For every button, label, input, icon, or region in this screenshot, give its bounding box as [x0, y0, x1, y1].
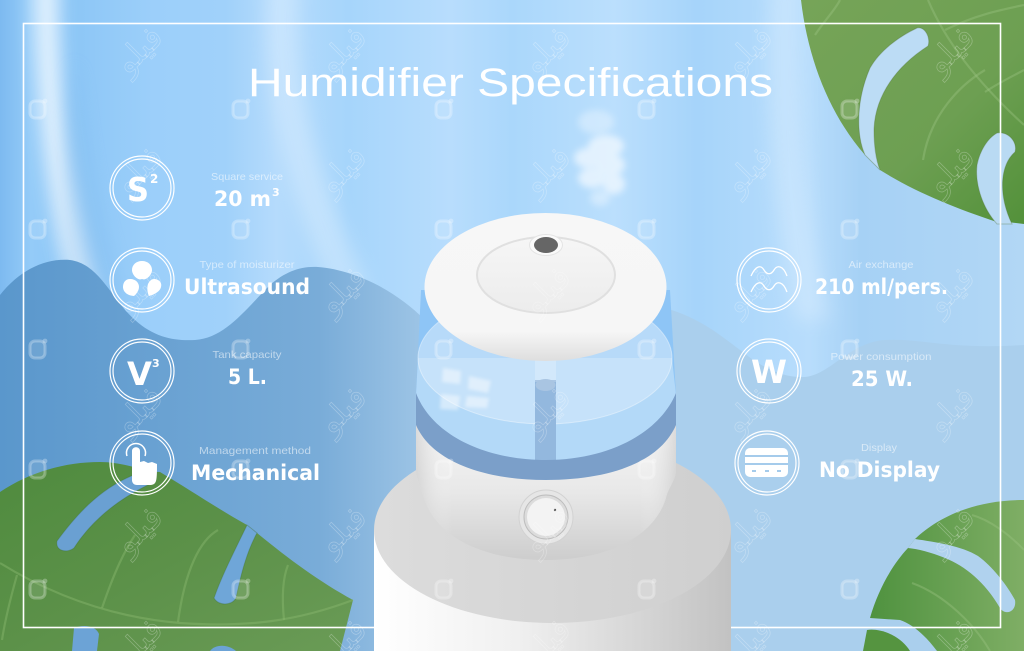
leaf slits — [859, 28, 929, 170]
leaf veins — [0, 530, 353, 640]
spec: power consumption: 25 W. — [851, 367, 913, 391]
leaf: top right — [801, 0, 1024, 224]
humidifier on pedestal — [374, 213, 731, 651]
watermark pattern: فیلو — [309, 258, 374, 323]
spec: tank capacity: Tank capacity — [212, 349, 282, 361]
watermark pattern: فیلو — [513, 498, 578, 563]
lid — [424, 213, 666, 361]
watermark pattern: فیلو — [513, 138, 578, 203]
leaf slits — [57, 474, 150, 551]
spec: tank capacity — [110, 339, 282, 403]
spec: type of moisturizer: Type of moisturizer — [200, 259, 295, 271]
watermark pattern: فیلو — [917, 18, 982, 83]
watermark pattern: فیلو — [513, 258, 578, 323]
icon: air waves — [737, 248, 801, 312]
spec: management method: Mechanical — [191, 461, 320, 485]
icon: V cubed: 3 — [152, 357, 160, 370]
spec: power consumption: Power consumption — [830, 351, 932, 363]
watermark pattern: فیلو — [105, 258, 170, 323]
spec: management method: Management method — [199, 445, 311, 457]
leaf veins — [815, 0, 1024, 160]
watermark pattern: فیلو — [105, 138, 170, 203]
watermark pattern: فیلو — [309, 498, 374, 563]
steam hole — [530, 234, 562, 256]
steam — [574, 110, 625, 206]
watermark pattern: فیلو — [105, 378, 170, 443]
blue band — [416, 393, 676, 480]
watermark pattern: فیلو — [309, 18, 374, 83]
watermark pattern: فیلو — [917, 258, 982, 323]
watermark pattern: فیلو — [715, 258, 780, 323]
water tube — [535, 380, 556, 462]
icon: S squared — [110, 156, 174, 220]
icon: display panel — [735, 431, 799, 495]
watermark pattern: فیلو — [917, 498, 982, 563]
watermark pattern: فیلو — [917, 378, 982, 443]
title: Humidifier Specifications — [248, 61, 773, 105]
watermark pattern: فیلو — [513, 18, 578, 83]
lid cap — [477, 237, 615, 313]
icon: S squared: S — [127, 170, 149, 209]
watermark pattern: فیلو — [513, 378, 578, 443]
spec: square service: Square service — [211, 171, 283, 183]
spec: management method — [110, 431, 320, 495]
leaf: bottom right — [863, 500, 1024, 651]
spec: square service: 3 — [272, 186, 280, 199]
spec: air exchange: Air exchange — [848, 259, 914, 271]
spec: square service — [110, 156, 283, 220]
spec: type of moisturizer: Ultrasound — [184, 275, 310, 299]
spec: air exchange — [737, 248, 948, 312]
watermark pattern: فیلو — [105, 18, 170, 83]
spec: square service: 20 m — [214, 187, 271, 211]
leaf veins — [912, 515, 1024, 651]
tank — [416, 290, 676, 462]
watermark pattern: فیلو — [715, 138, 780, 203]
watermark pattern: فیلو — [309, 138, 374, 203]
spec: air exchange: 210 ml/pers. — [815, 275, 948, 299]
icon: W: W — [751, 353, 787, 391]
spec: display — [735, 431, 940, 495]
spec: power consumption — [737, 339, 932, 403]
watermark pattern: فیلو — [917, 138, 982, 203]
control knob — [519, 490, 573, 544]
icon: water drops — [110, 248, 174, 312]
icon: S squared: 2 — [150, 172, 158, 186]
left wave — [0, 260, 425, 651]
window reflection — [440, 368, 491, 410]
watermark pattern: فیلو — [715, 378, 780, 443]
icon: V cubed: V — [127, 355, 152, 393]
leaf: bottom left — [0, 462, 353, 651]
watermark pattern: فیلو — [309, 378, 374, 443]
watermark pattern: فیلو — [105, 498, 170, 563]
right wave — [665, 308, 1024, 651]
watermark pattern: فیلو — [715, 18, 780, 83]
leaf slit — [908, 539, 1015, 612]
water surface — [418, 292, 672, 424]
icon: pointing hand — [110, 431, 174, 495]
base body — [416, 410, 676, 560]
spec: type of moisturizer — [110, 248, 310, 312]
spec: display: No Display — [819, 458, 940, 482]
spec: tank capacity: 5 L. — [228, 365, 267, 389]
pedestal — [374, 437, 731, 651]
watermark pattern: فیلو — [715, 498, 780, 563]
icon: W — [737, 339, 801, 403]
spec: display: Display — [861, 442, 898, 454]
icon: V cubed — [110, 339, 174, 403]
